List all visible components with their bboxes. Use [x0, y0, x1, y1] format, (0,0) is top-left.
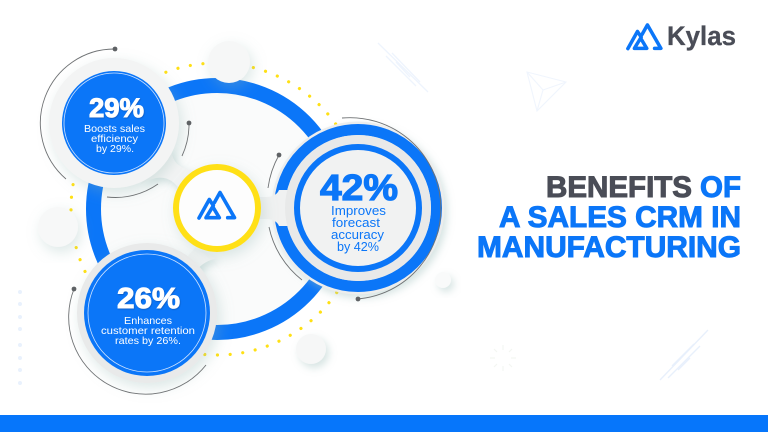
yellow dotted orbit	[71, 63, 363, 355]
42% value: 42%	[320, 167, 398, 208]
thin arcs with dots	[40, 49, 441, 394]
42% outer rim	[272, 122, 444, 294]
26% blue disc	[84, 250, 210, 376]
connector: centre to 42%	[252, 190, 290, 226]
inner disc of main ring	[99, 91, 335, 327]
decorative faint lines top	[378, 43, 428, 92]
stat: 42%	[252, 122, 444, 294]
42% description: Improves	[331, 204, 386, 218]
26% outer rim	[77, 243, 217, 383]
decorative faint sunburst	[490, 345, 516, 371]
42% description: forecast	[332, 216, 381, 230]
42% description	[331, 204, 386, 254]
29% value: 29%	[89, 93, 144, 123]
29% outer rim	[49, 58, 179, 188]
brand name: Kylas	[667, 21, 736, 51]
title: A SALES CRM IN	[499, 201, 741, 234]
26% description	[101, 315, 195, 347]
title: OF	[700, 171, 741, 204]
stat: 29%	[49, 58, 179, 188]
icon: centre logo mark	[199, 192, 234, 218]
29% description: efficiency	[91, 133, 139, 145]
title: MANUFACTURING	[477, 231, 741, 264]
42% description: by 42%	[337, 240, 379, 254]
26% description: Enhances	[124, 315, 172, 327]
sphere top	[208, 41, 250, 83]
arc end dots	[72, 47, 360, 301]
29% blue disc	[62, 71, 166, 175]
decorative dot column	[18, 290, 22, 385]
brand logo	[628, 21, 736, 51]
icon: brand logo mark	[628, 25, 661, 49]
bottom bar	[0, 415, 768, 432]
title	[477, 171, 741, 264]
26% value: 26%	[117, 283, 180, 315]
42% grey ring	[285, 135, 431, 281]
29% description: by 29%.	[96, 143, 134, 155]
29% description	[84, 123, 145, 155]
main blue ring	[94, 86, 340, 332]
connector: 26% to centre	[176, 248, 218, 292]
decorative faint paper plane	[527, 72, 566, 111]
decorative faint lines bottom	[660, 330, 708, 380]
title: BENEFITS	[546, 171, 692, 204]
connector: 29% to centre	[140, 145, 192, 190]
sphere right	[435, 272, 451, 288]
26% description: customer retention	[101, 325, 195, 337]
42% description: accuracy	[331, 228, 385, 242]
26% description: rates by 26%.	[115, 335, 181, 347]
stat: 26%	[77, 243, 217, 383]
centre yellow circle with logo	[176, 167, 258, 249]
42% inner blue ring	[297, 147, 419, 269]
29% description: Boosts sales	[84, 123, 145, 135]
sphere left	[38, 207, 78, 247]
sphere bottom right	[296, 334, 326, 364]
42% thick blue ring	[280, 130, 436, 286]
